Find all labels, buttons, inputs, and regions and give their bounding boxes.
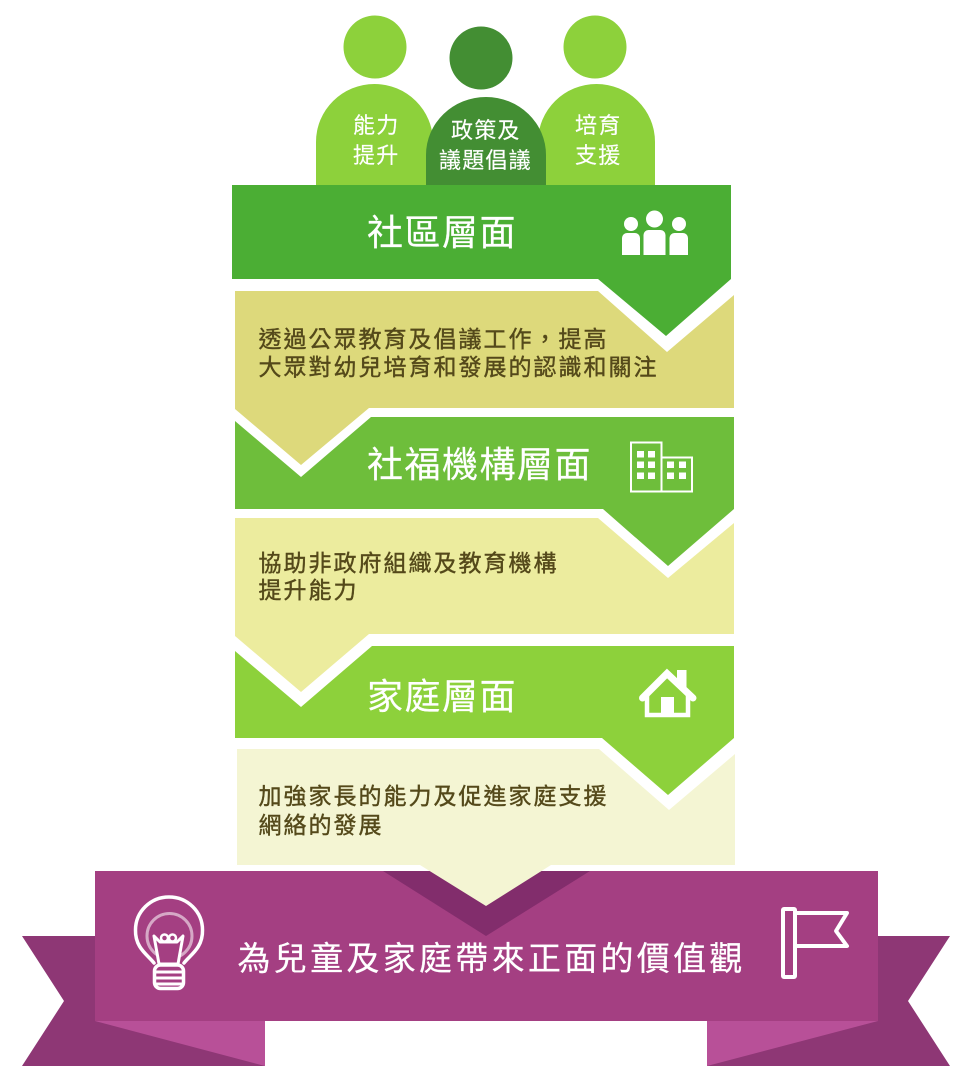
panel: community level heading [232, 185, 731, 336]
heading: community level: 社區層面 [367, 212, 517, 253]
icon: flag [783, 909, 847, 977]
person: capacity building: 提升 [353, 143, 399, 168]
banner: main purple ribbon [95, 871, 878, 1021]
icon: office buildings [631, 442, 692, 492]
person: nurturing support: 支援 [575, 143, 621, 168]
icon: people group [622, 210, 688, 255]
person: capacity building [316, 16, 433, 185]
icon: house [642, 670, 693, 716]
heading: social welfare organisation level: 社福機構層面 [367, 444, 592, 485]
panel: NGO level heading [235, 417, 734, 566]
banner: left ribbon tail [22, 936, 265, 1066]
text: family description [258, 783, 608, 838]
text: NGO description [258, 550, 558, 603]
person: policy and advocacy [426, 26, 546, 185]
text: NGO description: 提升能力 [258, 577, 358, 603]
person: policy and advocacy: 政策及 [451, 118, 521, 143]
heading: family level: 家庭層面 [367, 676, 517, 717]
person: nurturing support [538, 16, 655, 185]
text: family description: 網絡的發展 [258, 812, 384, 838]
panel: community level description [235, 291, 734, 465]
banner: dark chevron shadow [383, 871, 590, 936]
text: NGO description: 協助非政府組織及教育機構 [258, 550, 558, 576]
panel: family level description [237, 749, 735, 906]
panel: NGO level description [235, 518, 734, 692]
person: capacity building: 能力 [353, 113, 399, 138]
text: community description: 透過公眾教育及倡議工作，提高 [258, 326, 608, 352]
panel: family level heading [235, 646, 734, 795]
person: policy and advocacy: 議題倡議 [439, 148, 532, 173]
banner: right ribbon tail [707, 936, 950, 1066]
icon: light bulb [135, 897, 203, 988]
banner title: 為兒童及家庭帶來正面的價值觀 [238, 940, 746, 977]
text: family description: 加強家長的能力及促進家庭支援 [258, 783, 608, 809]
person: nurturing support: 培育 [575, 113, 621, 138]
text: community description: 大眾對幼兒培育和發展的認識和關注 [258, 354, 658, 380]
text: community description [258, 326, 658, 380]
